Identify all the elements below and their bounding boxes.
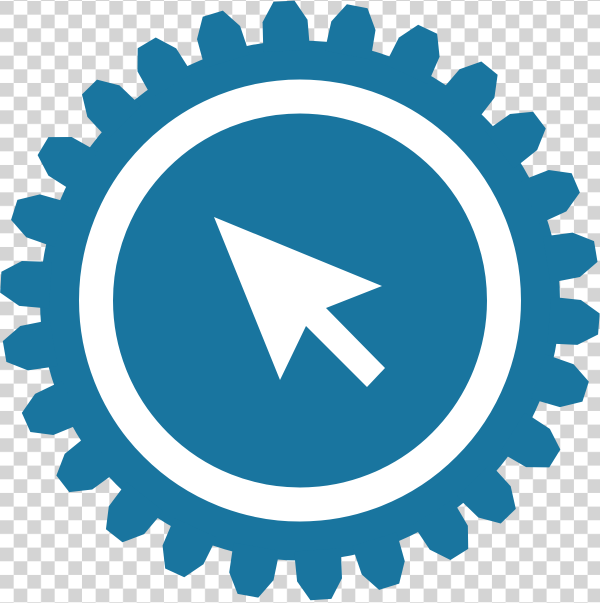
icon: cursor arrow — [214, 217, 385, 387]
white ring — [96, 96, 504, 504]
gear body — [40, 40, 560, 560]
